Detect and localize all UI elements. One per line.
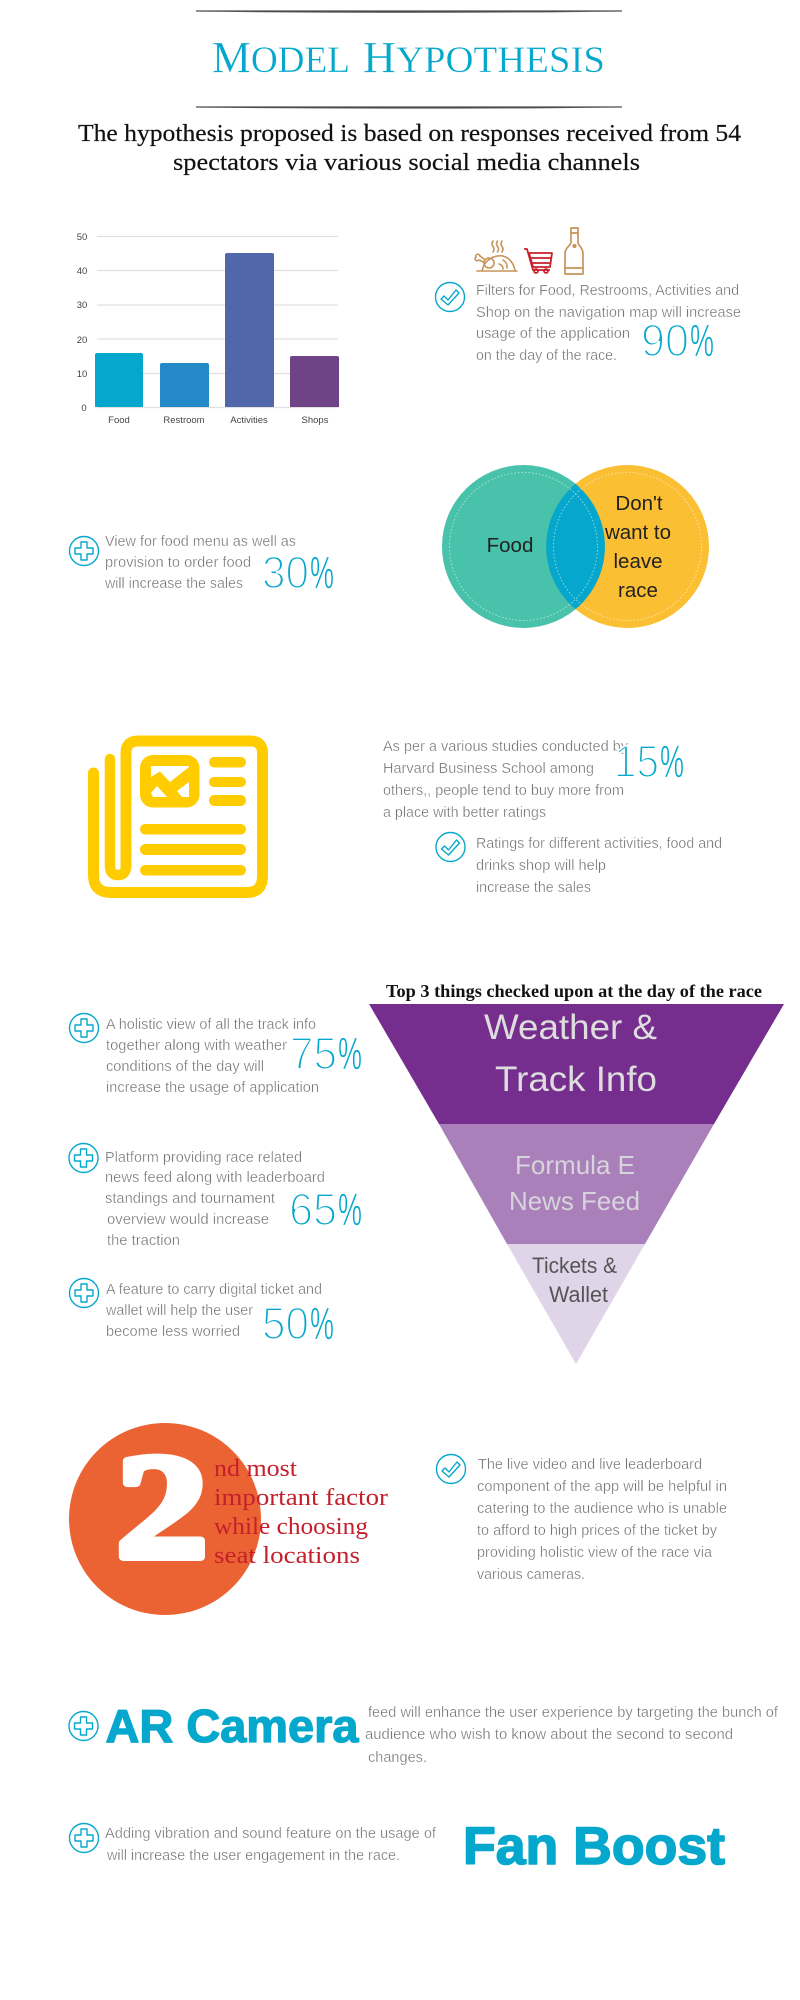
stat: 90%: 90 [641, 315, 689, 366]
bar chart: Shops [302, 415, 329, 426]
funnel tier: Formula E news feed: Formula E [515, 1150, 635, 1180]
text: track info feature: A holistic view of all the track info [106, 1016, 316, 1033]
text: news feed feature: Platform providing race related [105, 1149, 302, 1166]
text: ratings study: As per a various studies conducted by [383, 738, 628, 755]
label: Don't want to leave race [604, 492, 671, 602]
icon: check circle [436, 1454, 466, 1484]
text: AR camera [365, 1704, 779, 1766]
bar chart: 50 [77, 232, 87, 243]
stat: 75% [290, 1028, 362, 1079]
text: filters hypothesis [476, 282, 741, 364]
stat: 65%: 65 [289, 1184, 337, 1235]
icon: newspaper [94, 741, 262, 892]
bar chart [77, 232, 339, 426]
text: live video: catering to the audience who is unable [477, 1500, 727, 1517]
title: MODEL [212, 33, 350, 82]
heading: Fan Boost: Fan Boost [463, 1817, 725, 1876]
funnel tier: weather and track info: Track Info [495, 1060, 657, 1099]
text: live video: providing holistic view of the race via [477, 1544, 713, 1561]
bar: Restroom [160, 363, 209, 407]
text: ratings study [383, 738, 628, 821]
text: digital ticket feature: become less worried [106, 1323, 240, 1340]
text: live video: to afford to high prices of the ticket by [477, 1522, 717, 1539]
text: news feed feature: standings and tournament [105, 1190, 276, 1207]
bar chart: 0 [81, 403, 87, 414]
text: filters hypothesis: Shop on the navigation map will increase [476, 304, 741, 321]
text: news feed feature [105, 1149, 325, 1249]
text: AR camera: changes. [368, 1749, 427, 1766]
icon: bottle [565, 228, 583, 274]
bar chart: 30 [77, 300, 87, 311]
funnel tier: Formula E news feed [439, 1124, 714, 1244]
label: Food: Food [487, 534, 533, 557]
stat: 75%: % [338, 1028, 362, 1079]
stat: 30% [262, 547, 334, 598]
bar chart: 10 [77, 369, 87, 380]
heading: AR Camera: AR Camera [106, 1700, 359, 1752]
text: seat location factor: nd most [214, 1456, 297, 1482]
funnel tier: tickets and wallet [507, 1244, 645, 1364]
text: food menu: View for food menu as well as [105, 533, 296, 550]
text: seat location factor: while choosing [214, 1514, 368, 1540]
text: news feed feature: news feed along with leaderboard [105, 1169, 325, 1186]
text: vibration and sound: will increase the user engagement in the race. [106, 1847, 400, 1864]
bar chart: Food [108, 415, 130, 426]
text: ratings feature [476, 835, 722, 896]
bar chart: 20 [77, 335, 87, 346]
funnel tier: weather and track info [369, 1004, 784, 1124]
text: food menu [104, 533, 296, 592]
stat: 90%: % [690, 315, 714, 366]
label: Don't want to leave race: want to [604, 521, 671, 544]
text: filters hypothesis: usage of the application [476, 325, 630, 342]
text: food menu: provision to order food [105, 554, 251, 571]
badge: orange circle with 2: 2 [116, 1424, 208, 1590]
text: AR camera: audience who wish to know about the second to second [365, 1726, 733, 1743]
text: seat location factor: seat locations [214, 1543, 360, 1569]
text: seat location factor: important factor [214, 1485, 388, 1511]
label: Don't want to leave race: leave [613, 550, 663, 573]
funnel tier: tickets and wallet: Wallet [549, 1282, 608, 1307]
label: Don't want to leave race: Don't [615, 492, 663, 515]
text: ratings study: others,, people tend to buy more from [383, 782, 624, 799]
stat: 15%: 15 [614, 736, 659, 787]
text: digital ticket feature [105, 1281, 322, 1340]
subtitle: spectators via various social media channels [173, 150, 640, 176]
label: Don't want to leave race: race [618, 579, 658, 602]
bar chart: Activities [230, 415, 268, 426]
bar chart: Restroom [163, 415, 205, 426]
text: digital ticket feature: A feature to carry digital ticket and [106, 1281, 322, 1298]
icon: plus circle [70, 1278, 98, 1308]
text: ratings feature: increase the sales [476, 879, 591, 896]
icon: check circle [436, 832, 465, 862]
funnel chart [369, 1004, 784, 1364]
subtitle: The hypothesis proposed is based on responses received from 54 [78, 121, 741, 147]
text: filters hypothesis: Filters for Food, Restrooms, Activities and [476, 282, 739, 299]
text: AR camera: feed will enhance the user experience by targeting the bunch of [368, 1704, 779, 1721]
text: live video [477, 1456, 727, 1583]
subtitle [78, 121, 741, 176]
stat: 90% [641, 315, 714, 366]
text: vibration and sound: Adding vibration and sound feature on the usage of [105, 1825, 437, 1842]
text: digital ticket feature: wallet will help the user [105, 1302, 253, 1319]
text: vibration and sound [105, 1825, 437, 1864]
stat: 50%: 50 [262, 1298, 309, 1349]
stat: 30%: 30 [262, 547, 309, 598]
text: news feed feature: overview would increase [107, 1211, 269, 1228]
text: live video: various cameras. [477, 1566, 585, 1583]
funnel tier: tickets and wallet: Tickets & [532, 1253, 617, 1278]
title: HYPOTHESIS [363, 33, 605, 82]
text: news feed feature: the traction [107, 1232, 180, 1249]
title [212, 33, 605, 82]
stat: 30%: % [310, 547, 334, 598]
text: live video: component of the app will be helpful in [477, 1478, 727, 1495]
text: ratings study: Harvard Business School among [383, 760, 594, 777]
text: track info feature: conditions of the day will [106, 1058, 264, 1075]
bar chart: 40 [77, 266, 87, 277]
icon: check circle [436, 282, 464, 312]
icon: plus circle [70, 1014, 98, 1042]
funnel heading: Top 3 things checked upon at the day of the race [386, 981, 762, 1001]
badge: orange circle with 2 [69, 1423, 261, 1615]
stat: 50%: % [310, 1298, 334, 1349]
text: ratings feature: Ratings for different activities, food and [476, 835, 722, 852]
icon: shopping cart [524, 249, 552, 273]
stat: 75%: 75 [290, 1028, 337, 1079]
text: track info feature: increase the usage of application [106, 1079, 319, 1096]
icon: plus circle [69, 1144, 98, 1172]
funnel tier: Formula E news feed: News Feed [509, 1186, 640, 1216]
text: ratings study: a place with better ratings [383, 804, 546, 821]
stat: 65%: % [338, 1184, 362, 1235]
icon: roast chicken [475, 241, 517, 271]
icon: plus circle [70, 1824, 98, 1852]
bar: Food [95, 353, 143, 407]
bar: Shops [290, 356, 339, 407]
text: seat location factor [214, 1456, 388, 1569]
text: track info feature [106, 1016, 319, 1096]
icon: plus circle [69, 1712, 98, 1740]
venn diagram [442, 465, 709, 628]
stat: 50% [262, 1298, 334, 1349]
text: filters hypothesis: on the day of the race. [476, 347, 617, 364]
icon: plus circle [70, 536, 98, 566]
text: track info feature: together along with weather [106, 1037, 287, 1054]
text: live video: The live video and live leaderboard [478, 1456, 702, 1473]
text: ratings feature: drinks shop will help [476, 857, 606, 874]
funnel tier: weather and track info: Weather & [484, 1008, 657, 1047]
bar: Activities [225, 253, 274, 407]
text: food menu: will increase the sales [104, 575, 243, 592]
stat: 65% [289, 1184, 362, 1235]
stat: 15%: % [660, 736, 684, 787]
